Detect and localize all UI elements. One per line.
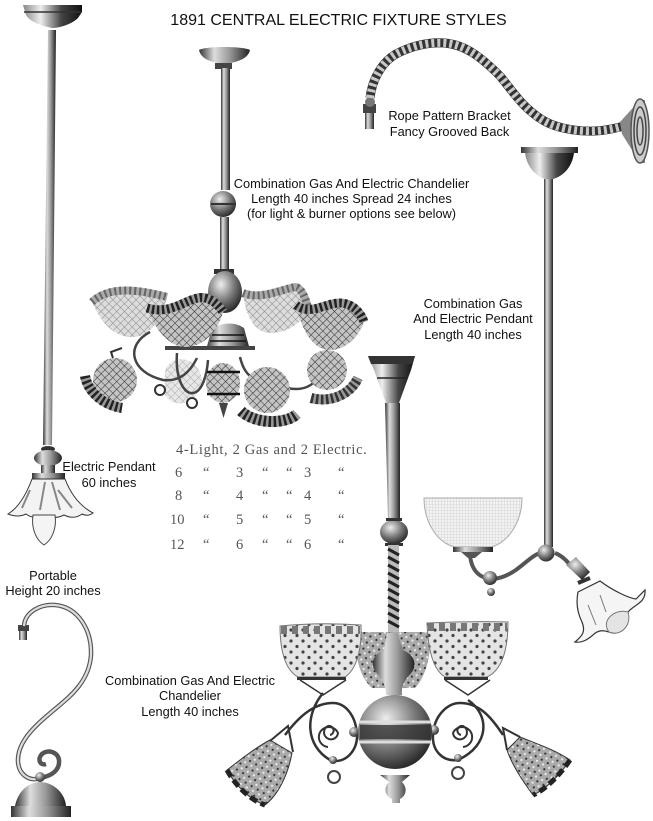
arms and hub xyxy=(134,332,327,393)
burner options table: “ xyxy=(203,465,209,481)
burner options table: “ xyxy=(286,488,292,504)
fixture: bottom chandelier xyxy=(227,356,570,805)
central finial xyxy=(373,633,415,695)
burner options table: “ xyxy=(262,465,268,481)
burner options table: 8 xyxy=(175,488,182,504)
burner options table: 3 xyxy=(304,465,311,481)
burner options table: 5 xyxy=(236,512,243,528)
burner options table: 6 xyxy=(236,537,243,553)
burner options table: “ xyxy=(286,537,292,553)
label: combination pendant: Length 40 inches xyxy=(424,327,522,342)
burner options table: 4-Light, 2 Gas and 2 Electric. xyxy=(176,442,367,458)
burner options table: “ xyxy=(262,512,268,528)
burner options table: 12 xyxy=(170,537,184,553)
fixture: electric pendant 60 inches xyxy=(8,5,93,545)
burner options table: “ xyxy=(286,465,292,481)
burner options table: “ xyxy=(338,488,344,504)
burner options table: 5 xyxy=(304,512,311,528)
label: combination pendant: Combination Gas xyxy=(424,296,522,311)
label: bottom chandelier: Combination Gas And Electric xyxy=(105,673,276,688)
burner options table: “ xyxy=(262,488,268,504)
label: portable lamp: Height 20 inches xyxy=(5,583,101,598)
burner options table: “ xyxy=(262,537,268,553)
label: portable lamp: Portable xyxy=(29,568,77,583)
front shades xyxy=(147,298,223,347)
lower globes xyxy=(93,358,137,402)
fixture: four-light chandelier xyxy=(85,47,364,422)
burner options table: “ xyxy=(286,512,292,528)
burner options table: “ xyxy=(338,465,344,481)
scroll arms xyxy=(285,693,357,761)
label: electric pendant: Electric Pendant xyxy=(62,459,156,474)
burner options table: 6 xyxy=(304,537,311,553)
label: combination pendant: And Electric Pendant xyxy=(413,311,533,326)
back cup xyxy=(356,632,430,688)
burner options table: 4 xyxy=(236,488,244,504)
back shades xyxy=(92,290,167,337)
tulip shades xyxy=(227,740,292,805)
label: four-light chandelier: Combination Gas And Electric Chandelier xyxy=(234,176,470,191)
label: rope pattern bracket: Fancy Grooved Back xyxy=(390,124,510,139)
label: rope pattern bracket: Rope Pattern Bracket xyxy=(388,108,511,123)
fixture: combination pendant xyxy=(424,147,645,642)
title: 1891 CENTRAL ELECTRIC FIXTURE STYLES xyxy=(170,12,507,29)
burner options table: “ xyxy=(338,537,344,553)
fixture: rope pattern bracket xyxy=(363,43,649,163)
burner options table: 10 xyxy=(170,512,184,528)
label: bottom chandelier: Length 40 inches xyxy=(141,704,239,719)
label: bottom chandelier: Chandelier xyxy=(159,688,222,703)
burner options table: “ xyxy=(203,537,209,553)
burner options table: “ xyxy=(203,488,209,504)
burner options table: “ xyxy=(338,512,344,528)
label: four-light chandelier: (for light & burner options see below) xyxy=(247,206,456,221)
burner options table xyxy=(170,442,367,553)
central ball xyxy=(358,695,432,769)
burner options table: 4 xyxy=(304,488,312,504)
label: electric pendant: 60 inches xyxy=(82,475,136,490)
burner options table: “ xyxy=(203,512,209,528)
cups xyxy=(280,624,361,677)
burner options table: 6 xyxy=(175,465,182,481)
fixture: portable lamp xyxy=(11,605,91,817)
burner options table: 3 xyxy=(236,465,243,481)
label: four-light chandelier: Length 40 inches Spread 24 inches xyxy=(251,191,452,206)
